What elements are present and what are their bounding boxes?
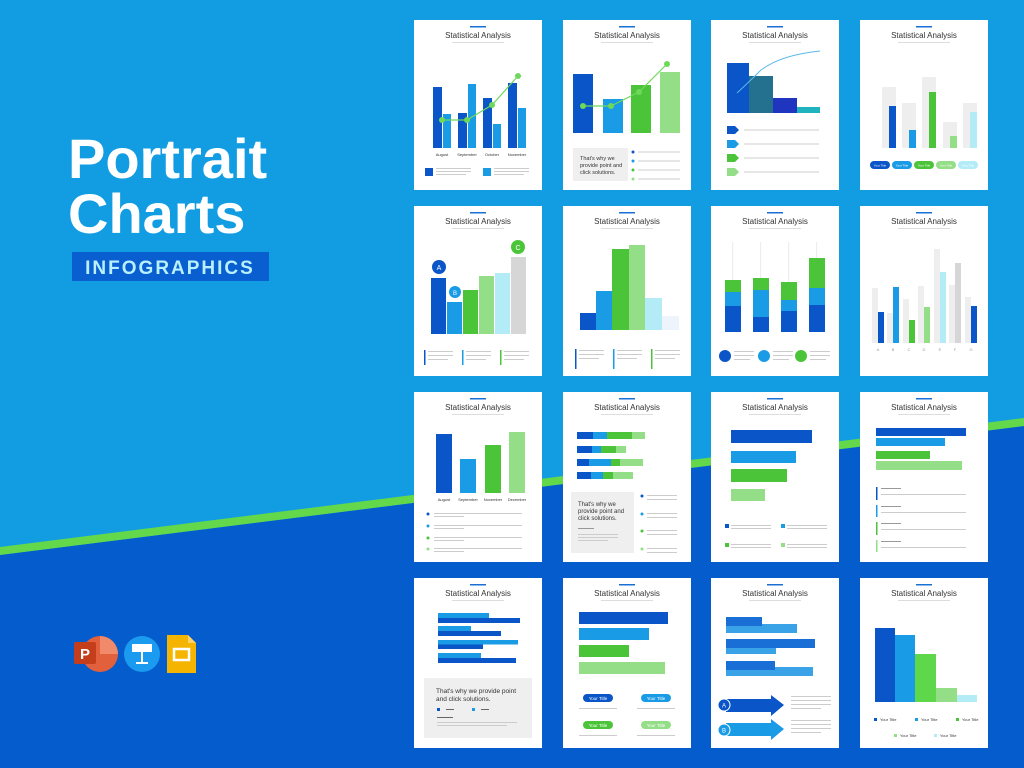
note box: provide point and bbox=[580, 163, 622, 169]
note box: provide point and bbox=[578, 509, 624, 515]
bars: F bbox=[954, 347, 957, 352]
card 4: column bars with grey backgrounds bbox=[860, 20, 988, 190]
rows bbox=[876, 487, 966, 552]
legend bbox=[425, 168, 529, 176]
card 13: paired horizontal bars with note bbox=[414, 578, 542, 748]
bars bbox=[438, 613, 520, 663]
legend bbox=[874, 717, 979, 738]
bars: November bbox=[508, 152, 527, 157]
pills: Your Title bbox=[589, 723, 608, 728]
bars: November bbox=[484, 497, 503, 502]
bars: C bbox=[515, 245, 521, 252]
note box: click solutions. bbox=[580, 170, 616, 176]
bars bbox=[726, 617, 815, 676]
card 2: bars with line and note: Statistical Analysis bbox=[594, 31, 660, 40]
card 11: horizontal bars: Statistical Analysis bbox=[742, 403, 808, 412]
legend bbox=[575, 349, 680, 369]
note box: That's why we bbox=[580, 156, 615, 162]
bars: B bbox=[453, 291, 457, 297]
legend tags bbox=[727, 126, 819, 176]
card 16: descending histogram: Statistical Analysis bbox=[891, 589, 957, 598]
bars bbox=[875, 628, 977, 702]
stacked bars bbox=[725, 242, 825, 332]
card 3: pareto chart bbox=[711, 20, 839, 190]
bars: D bbox=[923, 347, 926, 352]
card 3: pareto chart: Statistical Analysis bbox=[742, 31, 808, 40]
pills: Your Title bbox=[940, 164, 953, 168]
pills: Your Title bbox=[874, 164, 887, 168]
card 9: column chart with legend list: Statistical Analysis bbox=[445, 403, 511, 412]
title bbox=[68, 127, 267, 245]
legend text bbox=[725, 524, 827, 548]
card 12: horizontal bars with rows: Statistical Analysis bbox=[891, 403, 957, 412]
bars: A bbox=[877, 347, 880, 352]
icon: powerpoint: P bbox=[80, 646, 90, 663]
bars bbox=[431, 240, 526, 334]
note box bbox=[571, 492, 634, 553]
bars: December bbox=[508, 497, 527, 502]
card 8: paired columns A-G: Statistical Analysis bbox=[891, 217, 957, 226]
bars: August bbox=[436, 152, 449, 157]
bars bbox=[579, 612, 668, 674]
bars bbox=[573, 61, 680, 133]
bars: G bbox=[969, 347, 973, 352]
legend: Your Title bbox=[921, 717, 938, 722]
note box: and click solutions. bbox=[436, 696, 491, 703]
card 2: bars with line and note bbox=[563, 20, 691, 190]
card 8: paired columns A-G bbox=[860, 206, 988, 376]
pills: Your Title bbox=[896, 164, 909, 168]
bars bbox=[433, 73, 527, 157]
card 1: clustered bar with line: Statistical Analysis bbox=[445, 31, 511, 40]
bars: August bbox=[438, 497, 451, 502]
note box: That's why we provide point bbox=[436, 688, 516, 695]
legend circles bbox=[719, 350, 830, 362]
card 6: histogram: Statistical Analysis bbox=[594, 217, 660, 226]
legend: Your Title bbox=[880, 717, 897, 722]
pills bbox=[579, 694, 675, 736]
arrow callouts bbox=[718, 695, 831, 740]
bullets bbox=[632, 150, 680, 180]
note box: That's why we bbox=[578, 502, 616, 508]
card 4: column bars with grey backgrounds: Statistical Analysis bbox=[891, 31, 957, 40]
pills: Your Title bbox=[647, 723, 666, 728]
card 14: horizontal bars with pills: Statistical Analysis bbox=[594, 589, 660, 598]
arrow callouts: B bbox=[722, 728, 726, 734]
bars bbox=[436, 432, 527, 502]
note box bbox=[424, 678, 532, 738]
card 9: column chart with legend list bbox=[414, 392, 542, 562]
subtitle badge: INFOGRAPHICS bbox=[85, 258, 255, 279]
bars: A bbox=[437, 265, 442, 272]
pills: Your Title bbox=[918, 164, 931, 168]
pills: Your Title bbox=[647, 696, 666, 701]
note box: click solutions. bbox=[578, 516, 617, 522]
bars: C bbox=[908, 347, 911, 352]
card 1: clustered bar with line bbox=[414, 20, 542, 190]
legend: Your Title bbox=[940, 733, 957, 738]
card 11: horizontal bars bbox=[711, 392, 839, 562]
title: Charts bbox=[68, 182, 245, 245]
card 15: overlapping bars with arrows bbox=[711, 578, 839, 748]
card 13: paired horizontal bars with note: Statistical Analysis bbox=[445, 589, 511, 598]
legend: Your Title bbox=[962, 717, 979, 722]
bars bbox=[580, 245, 679, 330]
legend list bbox=[426, 512, 522, 552]
card 15: overlapping bars with arrows: Statistical Analysis bbox=[742, 589, 808, 598]
card 7: stacked columns bbox=[711, 206, 839, 376]
bars bbox=[872, 249, 977, 352]
bars: September bbox=[457, 152, 477, 157]
card 14: horizontal bars with pills bbox=[563, 578, 691, 748]
bars bbox=[882, 77, 977, 148]
bars: B bbox=[892, 347, 895, 352]
bars: September bbox=[458, 497, 478, 502]
icon: google slides bbox=[167, 635, 196, 673]
pills: Your Title bbox=[962, 164, 975, 168]
bullets bbox=[640, 494, 677, 553]
legend: Your Title bbox=[900, 733, 917, 738]
title: Portrait bbox=[68, 127, 267, 190]
arrow callouts: A bbox=[722, 704, 726, 710]
card 16: descending histogram bbox=[860, 578, 988, 748]
icon: keynote bbox=[124, 636, 160, 672]
legend bbox=[424, 350, 529, 365]
note box bbox=[573, 148, 628, 181]
card 10: stacked horizontal bars bbox=[563, 392, 691, 562]
subtitle badge bbox=[72, 252, 269, 281]
icon: powerpoint bbox=[74, 636, 118, 672]
card 12: horizontal bars with rows bbox=[860, 392, 988, 562]
card 5: bars with callout circles: Statistical Analysis bbox=[445, 217, 511, 226]
card 5: bars with callout circles bbox=[414, 206, 542, 376]
pills: Your Title bbox=[589, 696, 608, 701]
pills bbox=[870, 161, 978, 169]
bars: E bbox=[939, 347, 942, 352]
bars bbox=[731, 430, 812, 501]
card 6: histogram bbox=[563, 206, 691, 376]
bars bbox=[577, 432, 645, 479]
bars bbox=[876, 428, 966, 470]
card 10: stacked horizontal bars: Statistical Analysis bbox=[594, 403, 660, 412]
card 7: stacked columns: Statistical Analysis bbox=[742, 217, 808, 226]
bars bbox=[727, 51, 820, 113]
bars: October bbox=[485, 152, 500, 157]
